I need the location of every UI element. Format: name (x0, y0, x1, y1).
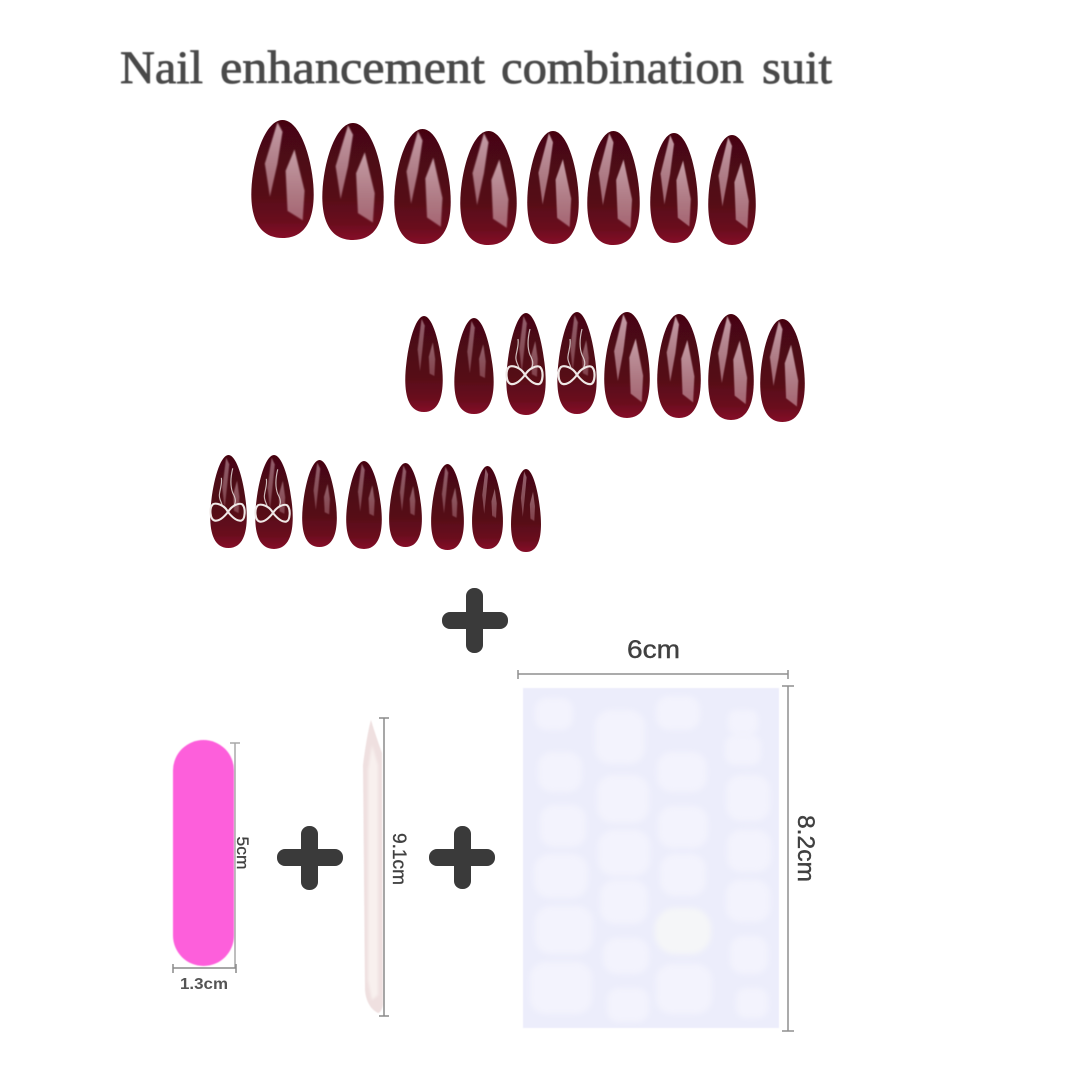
sheet width dimension: 6cm (627, 636, 680, 664)
plus icon: top (442, 588, 508, 653)
nail row 3: eight nails, two with bows (210, 455, 541, 552)
plus icon: between file and stick (277, 826, 343, 890)
file width dimension: 1.3cm (180, 976, 228, 993)
title: Nail (120, 42, 203, 94)
stick length dimension: 9.1cm (388, 833, 409, 885)
nail row 2: eight nails, two with bows (405, 312, 805, 422)
file height dimension (230, 743, 252, 968)
nail file (173, 740, 252, 993)
title: combination (501, 42, 744, 94)
plus icon: between stick and sheet (429, 826, 495, 889)
stick length dimension (379, 718, 409, 1016)
cuticle stick (363, 718, 409, 1016)
file width dimension (173, 964, 236, 993)
sheet height dimension: 8.2cm (792, 815, 819, 882)
title: enhancement (220, 42, 485, 94)
title (120, 42, 832, 94)
sheet width dimension (518, 636, 788, 679)
sheet height dimension (782, 686, 819, 1031)
jelly tabs (530, 696, 771, 1022)
title: suit (762, 42, 832, 94)
file height dimension: 5cm (233, 836, 252, 870)
nail row 1: eight plain burgundy nails (251, 120, 756, 245)
adhesive jelly tab sheet (523, 688, 779, 1028)
